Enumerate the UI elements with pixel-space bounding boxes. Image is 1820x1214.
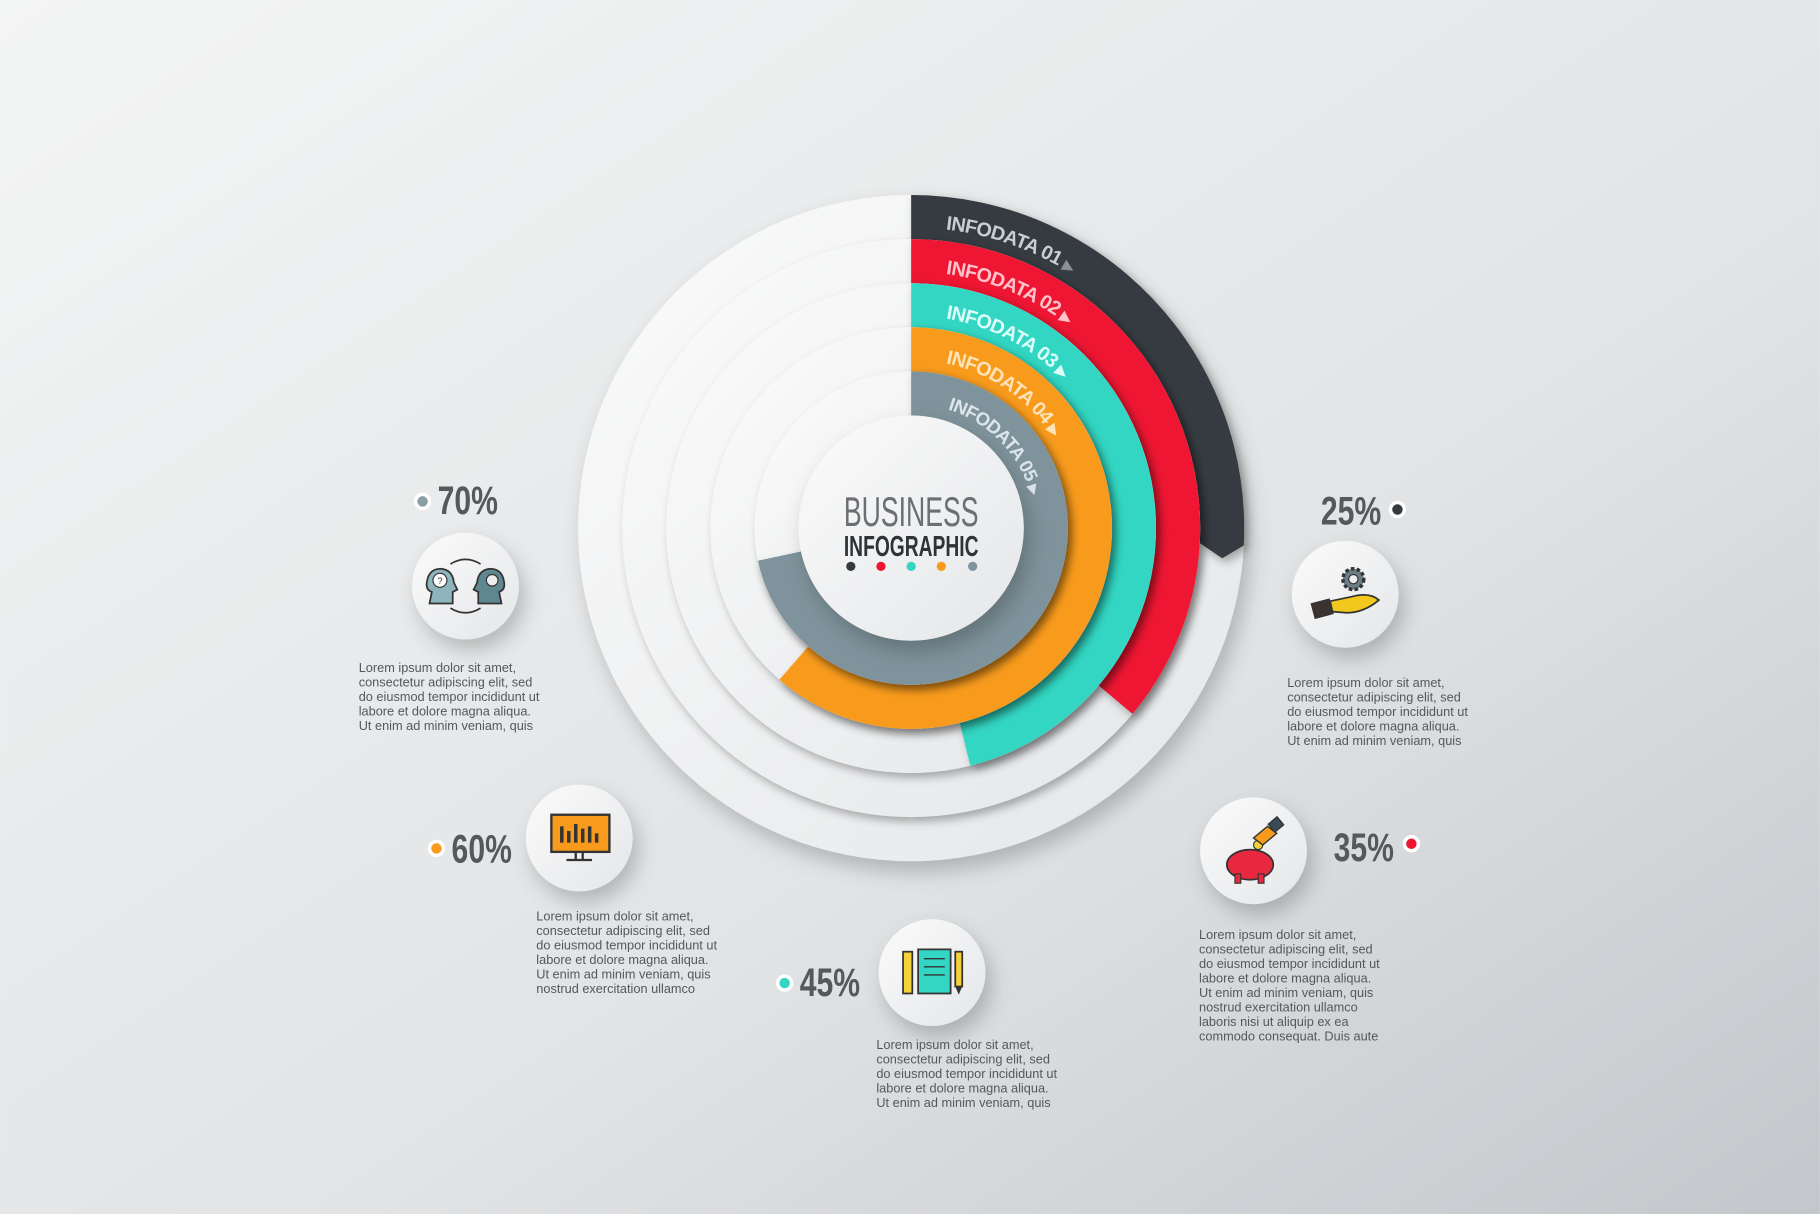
item: 25%: Ut enim ad minim veniam, quis: [1287, 733, 1462, 748]
band: infodata 05: INFODATA 05 ▶: [949, 398, 1038, 495]
band: infodata 02: INFODATA 02 ▶: [947, 260, 1070, 322]
item: 60%: Ut enim ad minim veniam, quis: [536, 966, 711, 981]
icon: notes: [879, 919, 985, 1026]
band: infodata 02: [910, 239, 1208, 720]
item: 45%: [778, 919, 1058, 1110]
item: 25%: consectetur adipiscing elit, sed: [1287, 690, 1461, 705]
item: 60%: labore et dolore magna aliqua.: [536, 952, 709, 967]
item: 25%: [1287, 490, 1468, 748]
band: infodata 01: [910, 195, 1252, 566]
item: 35%: 35%: [1334, 826, 1394, 870]
band: infodata 01: INFODATA 01 ▶: [947, 216, 1074, 271]
icon: two heads: [412, 533, 519, 639]
item: 25%: Lorem ipsum dolor sit amet,: [1287, 675, 1445, 690]
item: 60%: do eiusmod tempor incididunt ut: [536, 937, 717, 952]
icon: hand with gear: [1292, 541, 1399, 648]
band: infodata 03: [910, 283, 1164, 774]
item: 35%: commodo consequat. Duis aute: [1199, 1028, 1378, 1043]
item: 35%: Lorem ipsum dolor sit amet,: [1199, 927, 1356, 942]
band: infodata 04: [780, 327, 1120, 738]
item: 60%: 60%: [452, 827, 512, 871]
item: 70%: Lorem ipsum dolor sit amet,: [359, 660, 516, 675]
item: 35%: consectetur adipiscing elit, sed: [1199, 941, 1373, 956]
item: 35%: labore et dolore magna aliqua.: [1199, 970, 1371, 985]
item: 35%: do eiusmod tempor incididunt ut: [1199, 956, 1380, 971]
item: 60%: Lorem ipsum dolor sit amet,: [536, 908, 694, 923]
item: 45%: 45%: [800, 961, 860, 1005]
icon: monitor chart: [526, 785, 633, 891]
item: 35%: laboris nisi ut aliquip ex ea: [1199, 1014, 1349, 1029]
item: 25%: labore et dolore magna aliqua.: [1287, 719, 1459, 734]
item: 35%: nostrud exercitation ullamco: [1199, 999, 1358, 1014]
item: 25%: do eiusmod tempor incididunt ut: [1287, 704, 1468, 719]
icon: two heads: ?: [437, 576, 443, 586]
item: 70%: [359, 479, 540, 733]
item: 60%: nostrud exercitation ullamco: [536, 981, 695, 996]
item: 60%: [430, 785, 717, 996]
center circle title: BUSINESS: [844, 488, 978, 535]
item: 45%: do eiusmod tempor incididunt ut: [876, 1066, 1058, 1081]
center circle title: [799, 415, 1024, 641]
icon: piggy bank: [1200, 797, 1307, 904]
item: 45%: labore et dolore magna aliqua.: [876, 1081, 1049, 1096]
band: infodata 03: INFODATA 03 ▶: [947, 305, 1066, 377]
item: 60%: consectetur adipiscing elit, sed: [536, 923, 710, 938]
band: infodata 04: INFODATA 04 ▶: [947, 350, 1056, 436]
item: 45%: Lorem ipsum dolor sit amet,: [876, 1037, 1034, 1052]
item: 70%: consectetur adipiscing elit, sed: [359, 675, 532, 690]
item: 70%: 70%: [438, 479, 498, 523]
item: 70%: Ut enim ad minim veniam, quis: [359, 718, 533, 733]
item: 45%: Ut enim ad minim veniam, quis: [876, 1095, 1051, 1110]
item: 35%: [1199, 797, 1418, 1043]
chart: concentric ring diagram: [574, 192, 1260, 881]
band: infodata 05: [758, 371, 1076, 694]
item: 70%: labore et dolore magna aliqua.: [359, 704, 531, 719]
item: 35%: Ut enim ad minim veniam, quis: [1199, 985, 1373, 1000]
item: 25%: 25%: [1321, 490, 1381, 534]
item: 70%: do eiusmod tempor incididunt ut: [359, 689, 540, 704]
center circle title: INFOGRAPHIC: [844, 531, 979, 563]
item: 45%: consectetur adipiscing elit, sed: [876, 1052, 1050, 1067]
